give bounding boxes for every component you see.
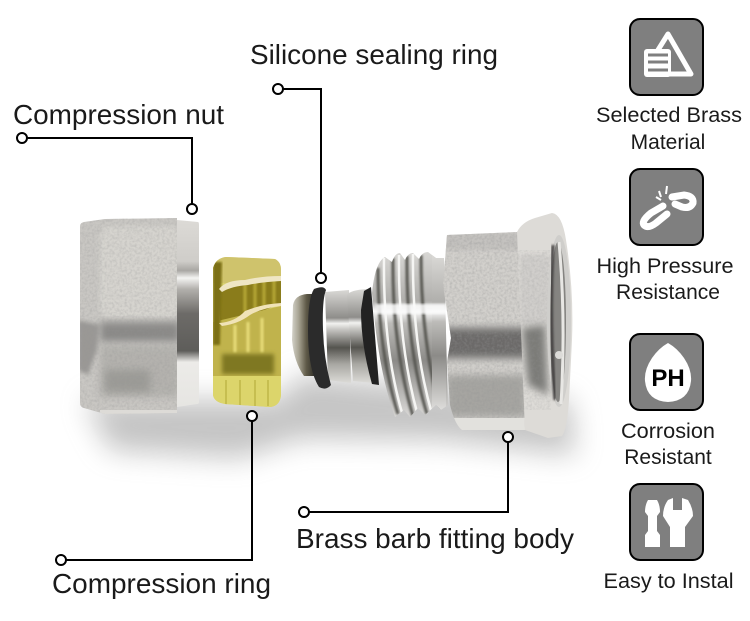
icon: high pressure resistance (630, 169, 703, 245)
o-ring 2 (361, 287, 379, 385)
text: high pressure resistance: High Pressure (596, 255, 734, 278)
photo: compression nut (78, 216, 199, 416)
text: corrosion resistant: Corrosion (621, 420, 715, 443)
icon: easy to install (630, 484, 703, 560)
icon: corrosion resistant (630, 334, 703, 410)
label: compression ring: Compression ring (52, 568, 271, 599)
label: silicone sealing ring: Silicone sealing ring (250, 39, 498, 70)
label: compression nut: Compression nut (13, 99, 224, 130)
product shadow (85, 375, 575, 458)
text: corrosion resistant (621, 420, 715, 469)
text: selected brass material: Selected Brass (596, 104, 742, 127)
text: easy to install: Easy to Instal (604, 570, 734, 593)
bore (547, 235, 571, 407)
photo: compression ring (213, 257, 281, 407)
threads (370, 250, 450, 420)
text: selected brass material: Material (631, 131, 705, 154)
text: corrosion resistant: Resistant (624, 446, 712, 469)
leader: compression ring (56, 411, 257, 565)
tip (292, 294, 314, 376)
flange (515, 210, 575, 440)
icon: selected brass material (630, 19, 703, 95)
leader: compression nut (17, 133, 197, 214)
barrel (325, 290, 351, 383)
text: high pressure resistance (596, 255, 734, 304)
o-ring 1 (308, 287, 331, 389)
text: high pressure resistance: Resistance (616, 281, 720, 304)
leader: brass barb fitting body (299, 432, 513, 517)
hex body (443, 232, 525, 430)
text: selected brass material (596, 104, 742, 154)
leader: silicone sealing ring (273, 84, 326, 283)
label: brass barb fitting body: Brass barb fitting body (296, 523, 574, 554)
photo: brass barb fitting body (292, 210, 575, 440)
icon: corrosion resistant: PH (651, 365, 685, 392)
